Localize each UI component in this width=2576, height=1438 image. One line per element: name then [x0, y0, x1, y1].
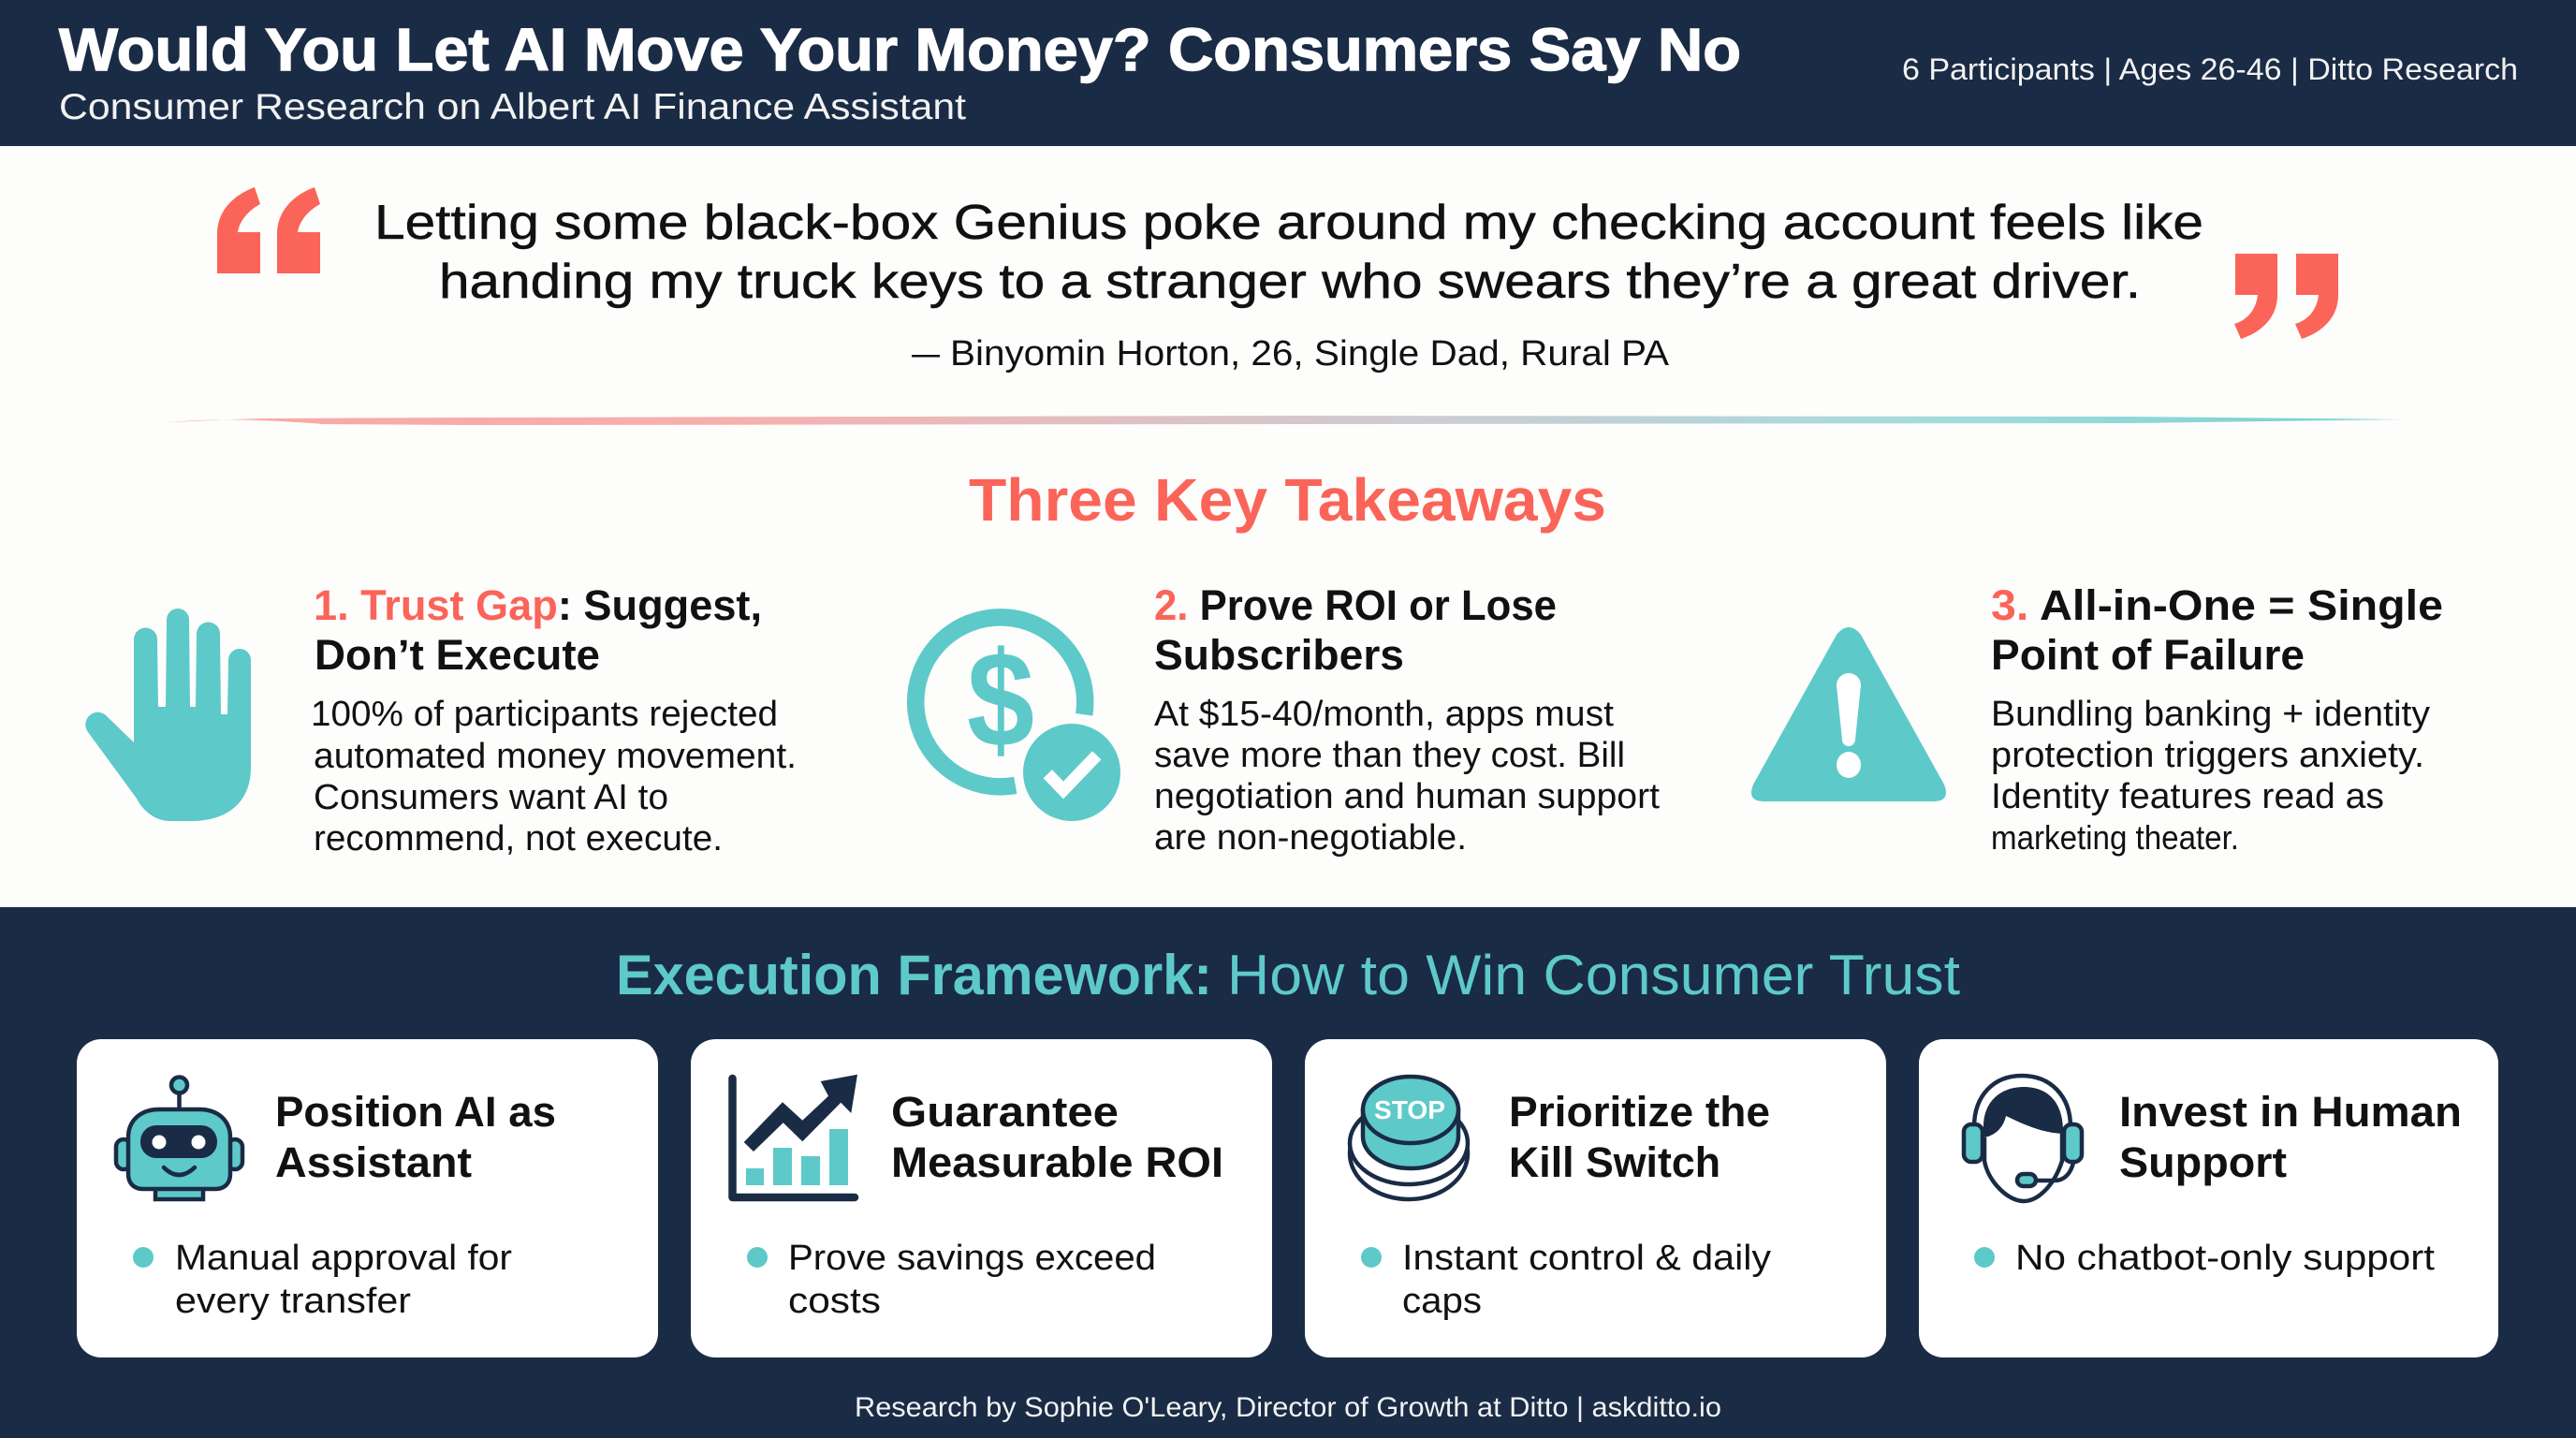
icon: stop button: [1350, 1077, 1468, 1199]
footer credit: Research by Sophie O'Leary, Director of Growth at Ditto | askditto.io: [855, 1392, 1721, 1423]
takeaway 2 body: [1154, 695, 1660, 858]
takeaway 2 body: At $15-40/month, apps must: [1154, 695, 1614, 734]
card title: [891, 1088, 1223, 1186]
takeaway 3 heading: [1991, 581, 2443, 679]
bullet: every transfer: [175, 1282, 411, 1321]
takeaway 3 body: marketing theater.: [1991, 818, 2239, 857]
takeaway 2 heading: 2. Prove ROI or Lose: [1154, 581, 1557, 629]
bullet: Prove savings exceed: [788, 1239, 1156, 1278]
panel: execution framework: [0, 907, 2576, 1438]
quote attribution: Binyomin Horton, 26, Single Dad, Rural PA: [950, 334, 1670, 374]
icon: opening quote mark: [217, 187, 320, 273]
card title: Guarantee: [891, 1088, 1119, 1136]
card title: [275, 1088, 556, 1186]
takeaway 1 heading: 1. Trust Gap: Suggest,: [314, 581, 762, 629]
card: position AI as assistant: [77, 1039, 658, 1357]
icon: stop button: STOP: [1374, 1095, 1445, 1124]
quote attribution: —: [912, 334, 940, 374]
bullet: No chatbot-only support: [2015, 1239, 2435, 1278]
panel: quote: [217, 187, 2338, 374]
card title: Assistant: [275, 1138, 472, 1186]
bullet: Manual approval for: [175, 1239, 512, 1278]
framework heading: Execution Framework:: [616, 944, 1212, 1006]
icon: dollar coin with check: $: [967, 624, 1034, 775]
bullet: Instant control & daily: [1402, 1239, 1771, 1278]
bullet: [1361, 1239, 1771, 1321]
card title: Invest in Human: [2119, 1088, 2462, 1136]
takeaway 3 body: Identity features read as: [1991, 777, 2384, 816]
card title: Position AI as: [275, 1088, 556, 1136]
takeaway 3 heading: 3. All-in-One = Single: [1991, 581, 2443, 629]
panel: takeaway 2: [915, 581, 1660, 858]
card: prioritize the kill switch: [1305, 1039, 1886, 1357]
takeaway 1 body: 100% of participants rejected: [311, 695, 778, 734]
title: Would You Let AI Move Your Money? Consumers Say No: [59, 16, 1741, 83]
icon: rising chart: [732, 1075, 857, 1197]
framework heading: How to Win Consumer Trust: [1227, 944, 1960, 1006]
study details: 6 Participants | Ages 26-46 | Ditto Research: [1902, 52, 2518, 86]
card title: Support: [2119, 1138, 2287, 1186]
quote text: Letting some black-box Genius poke around my checking account feels like: [374, 196, 2203, 250]
card title: Kill Switch: [1509, 1138, 1720, 1186]
takeaway 2 heading: Subscribers: [1154, 631, 1404, 679]
subtitle: Consumer Research on Albert AI Finance Assistant: [59, 87, 966, 127]
bullet: costs: [788, 1282, 881, 1321]
card title: [1509, 1088, 1770, 1186]
panel: takeaway 3: [1751, 581, 2443, 857]
card title: Measurable ROI: [891, 1138, 1223, 1186]
takeaway 1 heading: [314, 581, 762, 679]
takeaway 1 heading: Don’t Execute: [315, 631, 600, 679]
takeaway 1 body: automated money movement.: [314, 737, 797, 776]
bullet: [747, 1239, 1156, 1321]
heading: three key takeaways: Three Key Takeaways: [969, 466, 1606, 534]
header banner: [0, 0, 2576, 146]
card: invest in human support: [1919, 1039, 2498, 1357]
icon: raised hand: [85, 609, 251, 821]
takeaway 3 body: Bundling banking + identity: [1991, 695, 2430, 734]
takeaway 1 body: recommend, not execute.: [314, 819, 723, 858]
framework heading: [616, 944, 1960, 1006]
takeaway 2 heading: [1154, 581, 1557, 679]
takeaway 2 body: are non-negotiable.: [1154, 818, 1467, 858]
icon: support agent headset: [1964, 1076, 2082, 1201]
bullet: [133, 1239, 512, 1321]
takeaway 1 body: [311, 695, 797, 858]
icon: dollar coin with check: [915, 617, 1120, 821]
panel: takeaway 1: [85, 581, 797, 858]
card title: [2119, 1088, 2462, 1186]
takeaway 3 body: [1991, 695, 2430, 857]
takeaway 1 body: Consumers want AI to: [314, 778, 668, 817]
quote text: handing my truck keys to a stranger who swears they’re a great driver.: [439, 255, 2141, 309]
card: guarantee measurable ROI: [691, 1039, 1272, 1357]
card title: Prioritize the: [1509, 1088, 1770, 1136]
takeaway 3 body: protection triggers anxiety.: [1991, 736, 2424, 775]
takeaway 2 body: negotiation and human support: [1154, 777, 1660, 816]
icon: robot: [116, 1077, 242, 1199]
icon: closing quote mark: [2234, 254, 2338, 339]
quote text: [374, 196, 2203, 309]
icon: warning triangle: [1751, 627, 1946, 801]
bullet: caps: [1402, 1282, 1482, 1321]
takeaway 3 heading: Point of Failure: [1991, 631, 2305, 679]
takeaway 2 body: save more than they cost. Bill: [1154, 736, 1625, 775]
